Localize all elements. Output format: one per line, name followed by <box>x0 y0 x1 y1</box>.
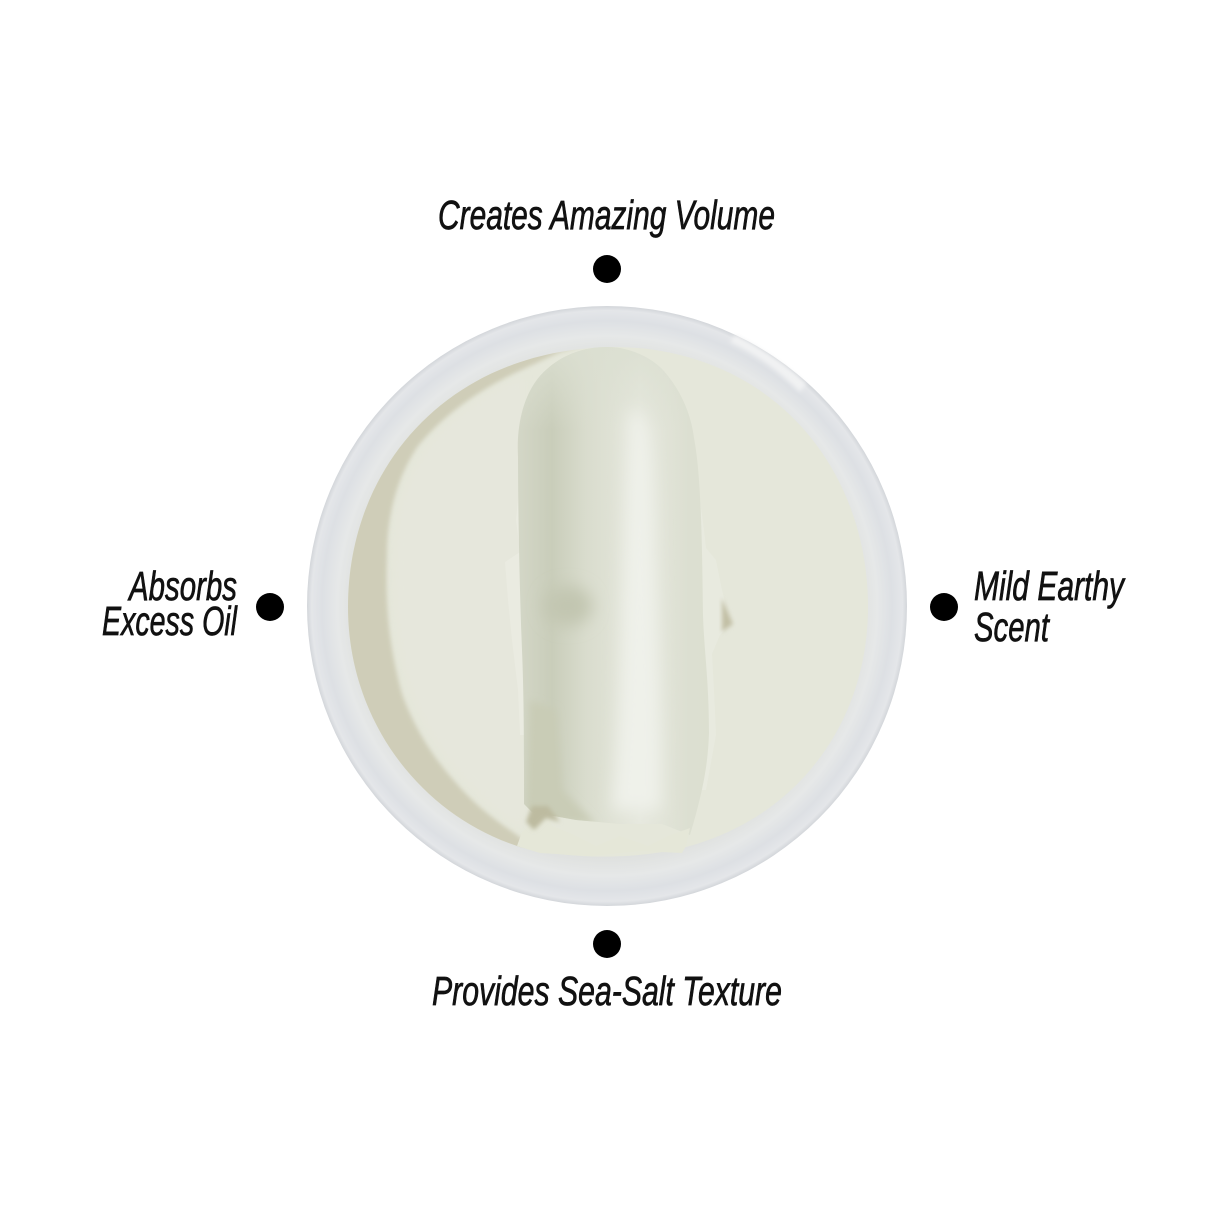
label: absorbs excess oil: Excess Oil <box>102 598 238 644</box>
product jar photo <box>307 306 907 906</box>
marker dot right <box>930 593 958 621</box>
label: mild earthy scent: Scent <box>974 604 1050 650</box>
groove lower shadow <box>527 706 592 822</box>
jar rim <box>307 306 907 906</box>
groove glossy streak <box>612 410 660 810</box>
crumbled edge right <box>696 470 731 790</box>
groove dark patch <box>554 585 595 627</box>
lighter surface on left <box>394 378 524 830</box>
crumbled edge left <box>505 460 530 735</box>
marker dot top <box>593 255 621 283</box>
shaded left crescent <box>348 351 568 848</box>
label: absorbs excess oil: Absorbs <box>127 563 237 609</box>
clay surface <box>340 340 880 870</box>
crumb shadow tip <box>722 598 733 632</box>
label: creates amazing volume: Creates Amazing Volume <box>438 192 775 238</box>
label: provides sea-salt texture: Provides Sea-Salt Texture <box>432 968 782 1014</box>
marker dot bottom <box>593 930 621 958</box>
crumb base shadow <box>526 806 560 830</box>
crumbled clay at base <box>517 812 690 856</box>
rim tab highlight <box>730 335 806 392</box>
scooped finger groove <box>518 347 709 834</box>
label: mild earthy scent: Mild Earthy <box>974 563 1126 609</box>
marker dot left <box>256 593 284 621</box>
